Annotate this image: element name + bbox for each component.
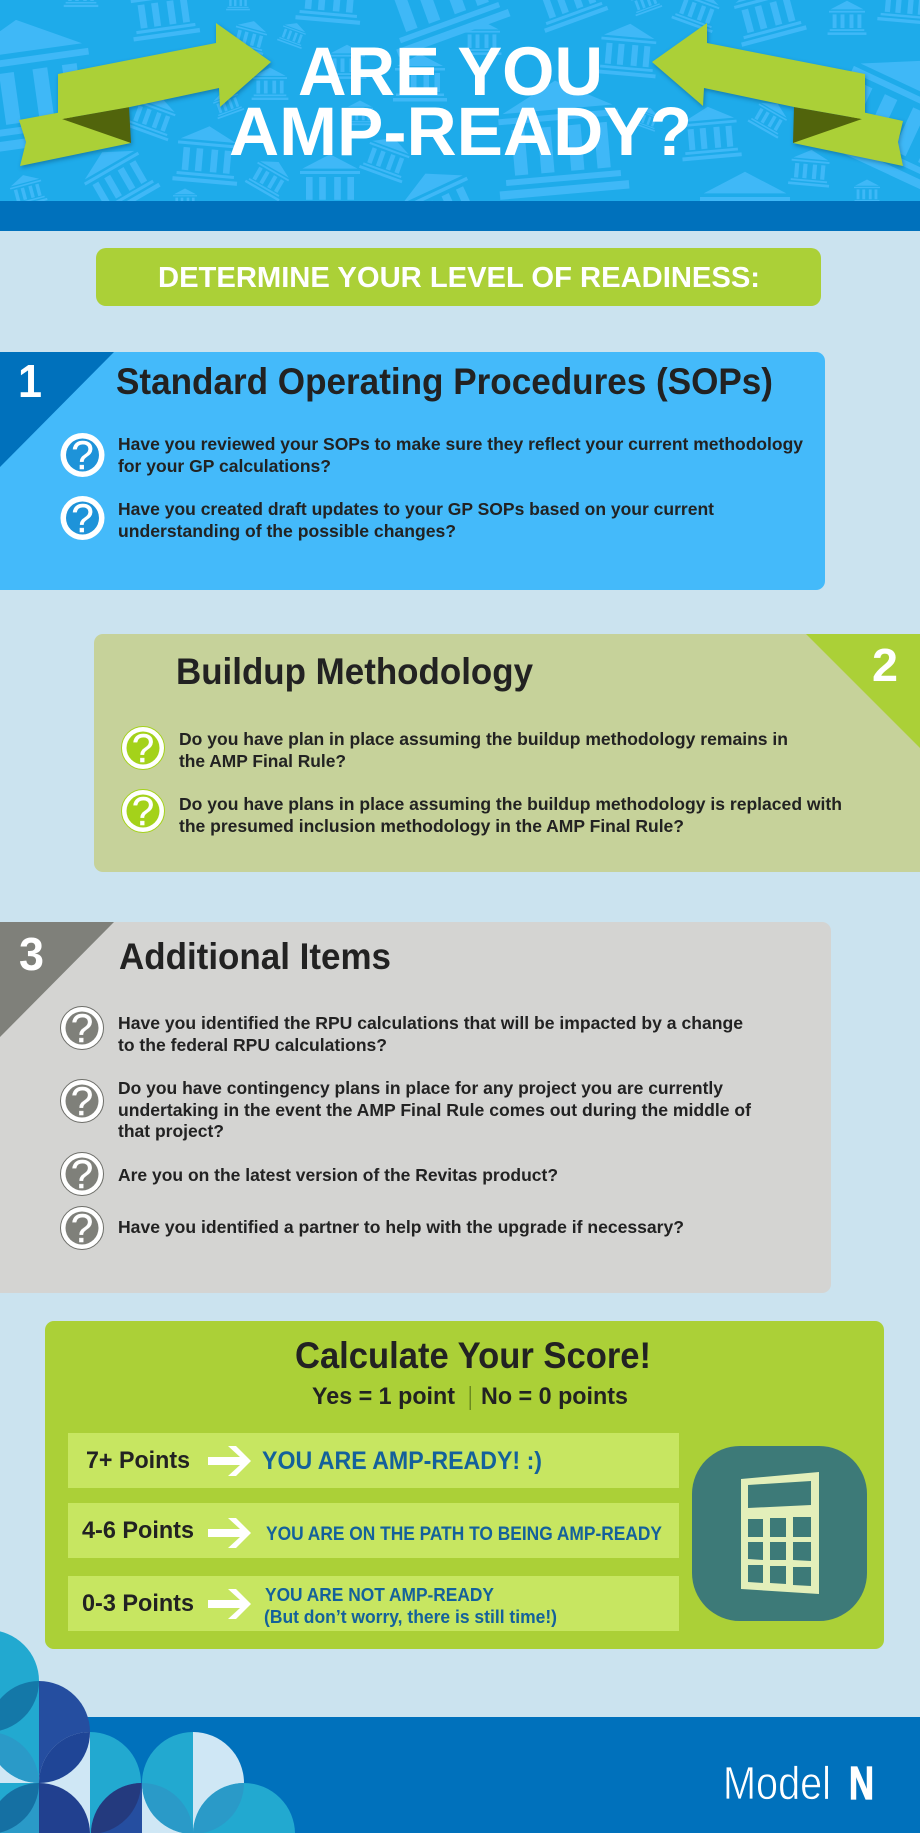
number corner 2 [806, 634, 920, 748]
icon: question 1a [60, 433, 104, 478]
score panel [45, 1321, 884, 1649]
number corner 2: 2 [872, 639, 898, 691]
Model N logo: Model [723, 1757, 831, 1809]
question text 3a: to the federal RPU calculations? [118, 1035, 387, 1055]
question text 2b: Do you have plans in place assuming the buildup methodology is replaced with [179, 794, 842, 814]
background temple pattern [0, 0, 920, 201]
icon: question 2a: ? [132, 727, 154, 771]
decorative circle pattern [0, 1630, 295, 1833]
icon: question 1b: ? [71, 497, 94, 541]
question text 2b: the presumed inclusion methodology in the AMP Final Rule? [179, 816, 684, 836]
title: AMP-READY? [229, 93, 692, 170]
icon: question 3b: ? [71, 1080, 93, 1124]
footer band [0, 1717, 920, 1833]
header banner [0, 0, 920, 231]
subtitle pill [96, 248, 821, 306]
score row: 0-3: 0-3 Points [82, 1590, 194, 1617]
number corner 1 [0, 352, 114, 467]
question text 3b: undertaking in the event the AMP Final Rule comes out during the middle of [118, 1100, 751, 1120]
icon: question 3a: ? [71, 1007, 93, 1051]
score row: 7+: 7+ Points [86, 1447, 190, 1474]
arrow [208, 1446, 251, 1476]
icon: question 1b [60, 496, 104, 541]
question text 1a: Have you reviewed your SOPs to make sure they reflect your current methodology [118, 434, 803, 454]
Model N logo: N [849, 1757, 874, 1809]
score row: 0-3: (But don’t worry, there is still time!) [264, 1607, 557, 1627]
question text 2a: the AMP Final Rule? [179, 751, 346, 771]
points legend [312, 1383, 628, 1410]
subtitle pill: DETERMINE YOUR LEVEL OF READINESS: [158, 262, 760, 294]
question text 3a [118, 1013, 743, 1055]
score heading: Calculate Your Score! [295, 1335, 651, 1376]
score row: 4-6: YOU ARE ON THE PATH TO BEING AMP-READY [266, 1524, 662, 1545]
icon: question 1a: ? [71, 434, 94, 478]
question text 3d: Have you identified a partner to help with the upgrade if necessary? [118, 1217, 684, 1237]
icon: question 2a [122, 726, 164, 771]
question text 3c: Are you on the latest version of the Revitas product? [118, 1165, 558, 1185]
icon: question 3b [60, 1080, 104, 1124]
right ribbon arrow [652, 23, 903, 166]
title [229, 33, 692, 170]
icon: question 3d [60, 1206, 104, 1251]
left ribbon arrow [19, 23, 271, 166]
question text 2a: Do you have plan in place assuming the buildup methodology remains in [179, 729, 788, 749]
question text 3b: Do you have contingency plans in place for any project you are currently [118, 1078, 723, 1098]
question text 3b: that project? [118, 1121, 224, 1141]
points legend: Yes = 1 point [312, 1383, 455, 1410]
heading: Additional Items: Additional Items [119, 936, 391, 977]
panel 3: Additional Items [0, 922, 831, 1293]
question text 3b [118, 1078, 751, 1141]
panel 2: Buildup Methodology [94, 634, 920, 872]
icon: question 2b [122, 790, 164, 834]
icon: question 2b: ? [132, 790, 154, 834]
number corner 3 [0, 922, 114, 1037]
heading: Buildup: Buildup Methodology [176, 651, 533, 692]
panel 1: Standard Operating Procedures [0, 352, 825, 590]
question text 1b [118, 499, 714, 541]
icon: question 3c: ? [71, 1153, 93, 1197]
question text 1b: understanding of the possible changes? [118, 521, 456, 541]
icon: question 3c [60, 1152, 104, 1197]
number corner 3: 3 [19, 928, 44, 980]
question text 3a: Have you identified the RPU calculations that will be impacted by a change [118, 1013, 743, 1033]
question text 2b [179, 794, 842, 836]
score row: 4-6: 4-6 Points [82, 1517, 194, 1544]
question text 1b: Have you created draft updates to your GP SOPs based on your current [118, 499, 714, 519]
arrow [208, 1589, 251, 1619]
icon: calculator [692, 1446, 867, 1621]
bottom band [0, 201, 920, 231]
icon: question 3a [60, 1006, 104, 1051]
number corner 1: 1 [18, 355, 42, 407]
score row: 0-3: YOU ARE NOT AMP-READY [265, 1585, 494, 1605]
score row: 4-6 [68, 1503, 679, 1558]
score row: 7+: YOU ARE AMP-READY! :) [262, 1447, 542, 1475]
question text 1a [118, 434, 803, 476]
question text 1a: for your GP calculations? [118, 456, 331, 476]
question text 2a [179, 729, 788, 771]
points legend: No = 0 points [481, 1383, 628, 1410]
score row: 0-3 [68, 1576, 679, 1631]
heading: SOPs: Standard Operating Procedures (SOPs) [116, 361, 773, 402]
score row: 7+ [68, 1433, 679, 1488]
arrow [208, 1518, 251, 1548]
icon: question 3d: ? [71, 1207, 93, 1251]
title: ARE YOU [298, 33, 603, 110]
